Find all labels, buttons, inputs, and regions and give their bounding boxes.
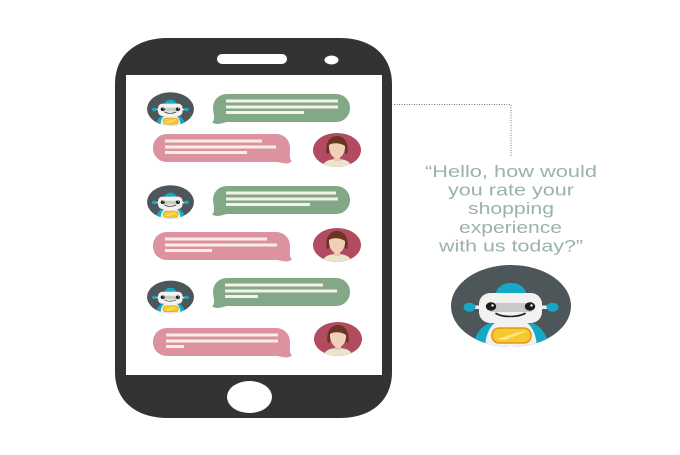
- green message bubble 1: [212, 94, 350, 124]
- robot avatar 3: [147, 281, 194, 315]
- quote text: “Hello, how would: [425, 162, 597, 181]
- quote text: you rate your: [448, 180, 574, 200]
- phone body: [115, 38, 392, 418]
- phone speaker: [217, 54, 287, 64]
- quote text: [425, 162, 597, 256]
- green message bubble 2: [212, 186, 350, 216]
- phone home button: [227, 381, 272, 413]
- woman avatar 3: [314, 322, 362, 357]
- phone camera: [324, 56, 338, 64]
- robot avatar 2: [147, 185, 194, 220]
- pink message bubble 3: [153, 328, 292, 358]
- quote text: with us today?”: [438, 236, 583, 256]
- chatbot infographic: [115, 38, 596, 418]
- woman avatar 1: [313, 133, 361, 168]
- pink message bubble 1: [153, 134, 292, 164]
- green message bubble 3: [212, 278, 350, 308]
- woman avatar 2: [313, 228, 361, 263]
- quote text: shopping: [468, 199, 554, 218]
- phone screen: [126, 75, 382, 375]
- robot avatar 1: [147, 92, 194, 127]
- quote text: experience: [459, 218, 562, 237]
- pink message bubble 2: [153, 232, 292, 262]
- dotted connector: [394, 104, 511, 156]
- large robot avatar: [451, 265, 571, 350]
